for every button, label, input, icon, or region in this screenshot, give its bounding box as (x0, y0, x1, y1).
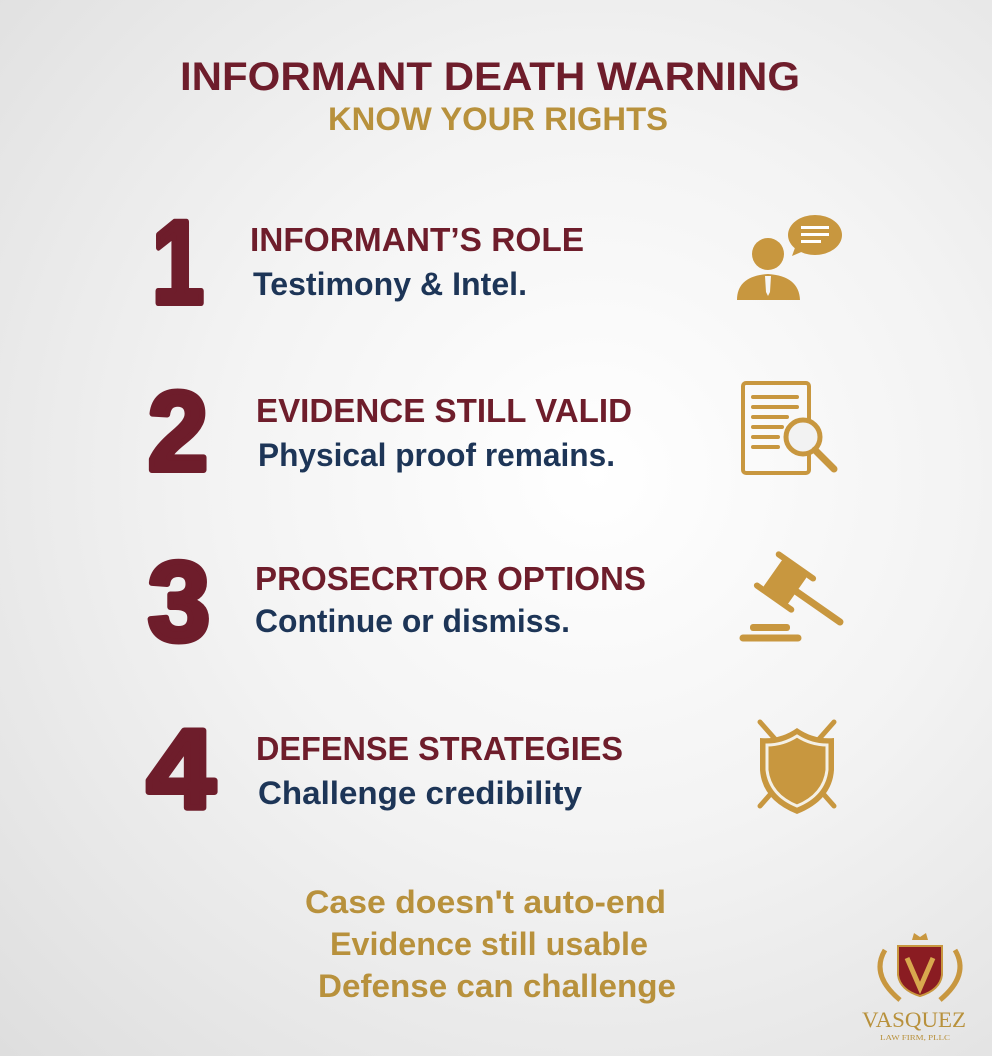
heading 4: DEFENSE STRATEGIES (256, 730, 623, 767)
row 1 (152, 197, 584, 329)
icon: document with magnifier (743, 383, 834, 473)
logo: VASQUEZ (862, 1007, 966, 1032)
text 1: Testimony & Intel. (253, 266, 527, 302)
heading 1: INFORMANT’S ROLE (250, 221, 584, 258)
summary text (305, 884, 676, 1004)
heading 3: PROSECRTOR OPTIONS (255, 560, 646, 597)
heading 2: EVIDENCE STILL VALID (256, 392, 632, 429)
icon: person with speech bubble (737, 215, 842, 300)
text 2: Physical proof remains. (258, 437, 615, 473)
number 1: 1 (152, 197, 204, 329)
subtitle: KNOW YOUR RIGHTS (328, 101, 668, 137)
icon: gavel (743, 554, 840, 638)
row 3 (148, 539, 646, 664)
icon: shield with swords (760, 722, 834, 814)
summary text: Case doesn't auto-end (305, 884, 666, 920)
number 3: 3 (148, 539, 210, 664)
number 2: 2 (148, 369, 208, 494)
title: INFORMANT DEATH WARNING (180, 55, 800, 99)
number 4: 4 (147, 707, 215, 832)
logo (862, 933, 966, 1042)
row 2 (148, 369, 632, 494)
text 3: Continue or dismiss. (255, 603, 570, 639)
summary text: Evidence still usable (330, 926, 648, 962)
summary text: Defense can challenge (318, 968, 676, 1004)
row 4 (147, 707, 623, 832)
text 4: Challenge credibility (258, 775, 582, 811)
logo: LAW FIRM, PLLC (880, 1034, 950, 1042)
